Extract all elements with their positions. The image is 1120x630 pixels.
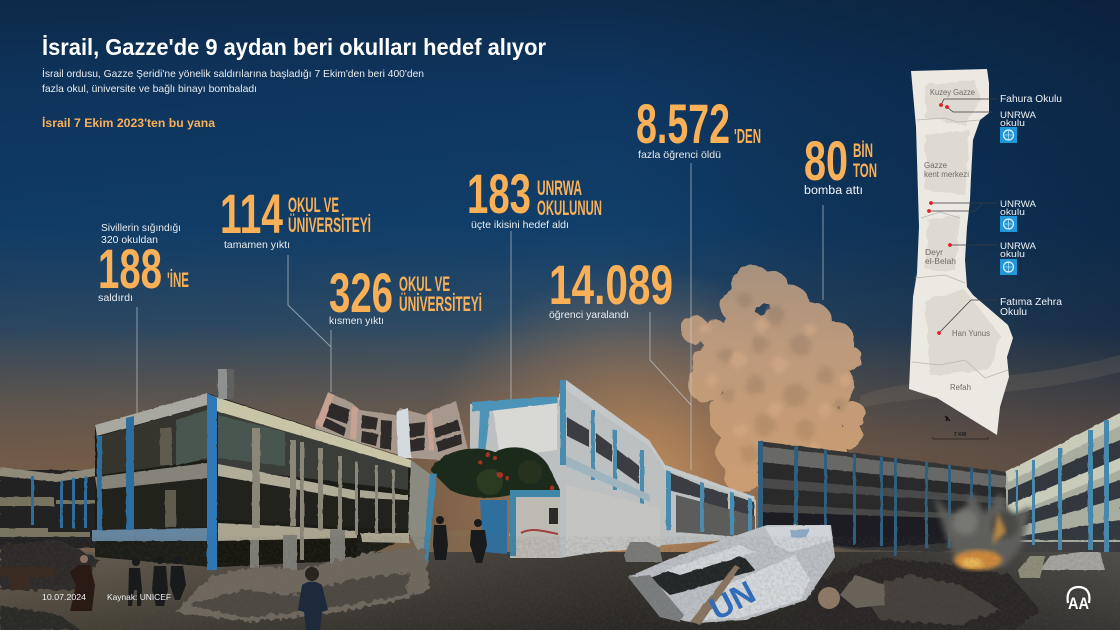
map school labels: Okulu <box>1000 307 1027 318</box>
map labels: el-Belah <box>925 257 956 266</box>
stat: 326 <box>329 261 482 327</box>
stat: 114 <box>220 182 371 251</box>
explosion <box>934 492 1030 570</box>
stat: 80 bin ton: bomba attı <box>804 185 863 197</box>
map school labels <box>1000 94 1062 318</box>
map school labels: Fatıma Zehra <box>1000 297 1062 308</box>
UN lettering: UN <box>703 574 761 627</box>
stat: 183: UNRWA <box>537 177 582 200</box>
roof slabs <box>95 393 207 436</box>
stat: 14.089: 14.089 <box>549 253 673 316</box>
stat: 188: 188 <box>98 237 162 300</box>
middle ruined towers <box>315 392 468 460</box>
map labels <box>924 88 990 392</box>
map labels: Refah <box>950 383 971 392</box>
stat: 188: saldırdı <box>98 292 133 304</box>
school location dots <box>927 103 952 335</box>
right wing building <box>1006 413 1120 552</box>
stat: 80 bin ton: BİN <box>853 139 873 162</box>
subtitle <box>42 67 424 95</box>
smoke cloud <box>681 265 866 493</box>
map of Gaza <box>909 69 1013 435</box>
leader lines <box>137 163 823 598</box>
rubble grain <box>0 545 1120 630</box>
stat: 326: 326 <box>329 261 393 324</box>
footer date: 10.07.2024 <box>42 592 86 602</box>
stat: 183: üçte ikisini hedef aldı <box>471 219 569 231</box>
stat: 114: OKUL VE <box>288 194 339 217</box>
subtitle: İsrail ordusu, Gazze Şeridi'ne yönelik saldırılarına başladığı 7 Ekim'den beri 400'den <box>42 67 424 80</box>
map school labels: okulu <box>1000 249 1025 259</box>
people <box>0 516 487 630</box>
stat: 183: 183 <box>467 162 531 225</box>
map school labels: okulu <box>1000 207 1025 217</box>
stat: 183: OKULUNUN <box>537 197 602 220</box>
icon: UN logo <box>1000 127 1017 143</box>
map scale <box>933 416 988 439</box>
stat: 188: Sivillerin sığındığı <box>101 222 181 234</box>
icon: UN logo <box>1000 259 1017 275</box>
stat: 8.572: 'DEN <box>734 126 761 148</box>
columns <box>207 393 217 570</box>
stat: 188: 'İNE <box>167 269 189 292</box>
water tank <box>218 369 234 399</box>
wrecked UN vehicle <box>628 525 885 627</box>
subtitle: fazla okul, üniversite ve bağlı binayı bombaladı <box>42 83 257 95</box>
stat: 183 <box>467 162 602 231</box>
stat: 188: 320 okuldan <box>101 234 158 246</box>
map school labels: UNRWA <box>1000 241 1036 251</box>
rubble under school <box>0 540 430 630</box>
big ruined school building <box>92 369 437 572</box>
stat: 114: 114 <box>220 182 283 245</box>
ground <box>0 552 1120 630</box>
AA logo <box>1068 587 1089 613</box>
map leader lines <box>929 99 998 333</box>
stat: 80 bin ton: TON <box>853 160 877 182</box>
AA logo: AA <box>1068 594 1089 613</box>
title: İsrail, Gazze'de 9 aydan beri okulları hedef alıyor <box>42 34 546 60</box>
parked cars <box>624 542 1105 578</box>
map school labels: UNRWA <box>1000 110 1036 120</box>
central building with blue columns <box>470 380 756 558</box>
stat: 326: OKUL VE <box>399 273 450 296</box>
map labels: Kuzey Gazze <box>930 88 976 97</box>
far left building <box>0 467 96 548</box>
stat: 114: ÜNİVERSİTEYİ <box>288 214 371 237</box>
front small blue block with gate <box>480 490 560 558</box>
map scale: 7 KM <box>954 432 966 438</box>
stat: 326: ÜNİVERSİTEYİ <box>399 293 482 316</box>
stat: 114: tamamen yıktı <box>224 239 290 251</box>
footer source: Kaynak: UNICEF <box>107 592 171 602</box>
stat: 14.089: öğrenci yaralandı <box>549 309 629 321</box>
stat: 326: kısmen yıktı <box>329 315 384 327</box>
map labels: Deyr <box>925 248 943 257</box>
map labels: Han Yunus <box>952 329 990 338</box>
tree with red flowers <box>430 447 560 498</box>
map labels: kent merkezi <box>924 170 969 179</box>
map school labels: okulu <box>1000 118 1025 128</box>
stat: 14.089 <box>549 253 673 321</box>
map school labels: UNRWA <box>1000 199 1036 209</box>
stat: 8.572: fazla öğrenci öldü <box>638 149 721 161</box>
center-right dark building <box>758 441 1006 556</box>
stat: 80 bin ton: 80 <box>804 129 848 192</box>
right end wall <box>408 460 430 560</box>
map labels: Gazze <box>924 161 948 170</box>
map school labels: Fahura Okulu <box>1000 94 1062 105</box>
icon: UN logo <box>1000 216 1017 232</box>
stat: 8.572: 8.572 <box>636 92 730 155</box>
rubble field <box>770 558 1040 630</box>
section heading: İsrail 7 Ekim 2023'ten bu yana <box>42 115 215 130</box>
